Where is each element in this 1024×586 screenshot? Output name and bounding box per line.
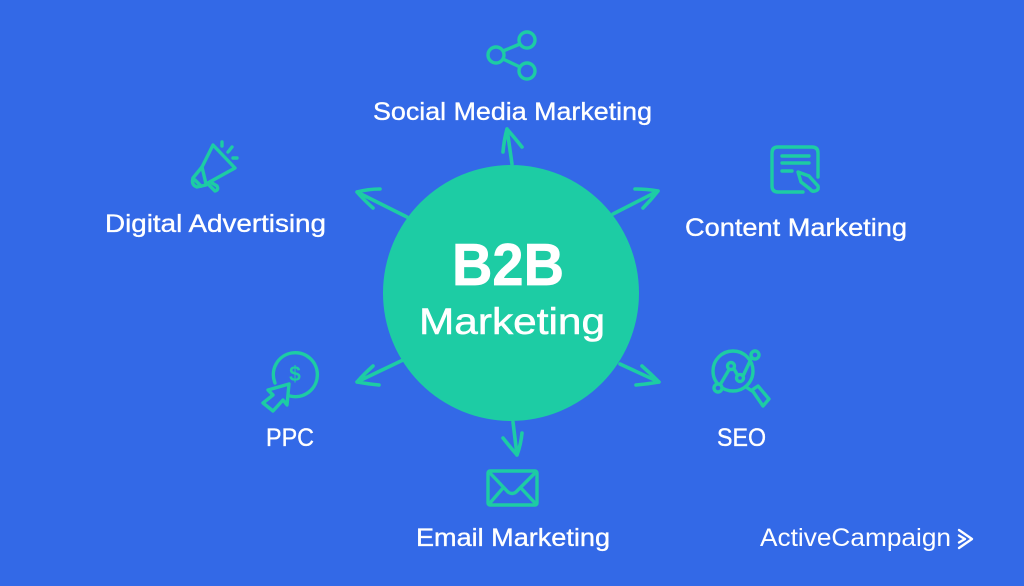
logo: ActiveCampaign: ActiveCampaign bbox=[760, 524, 951, 552]
label: SEO: SEO bbox=[717, 424, 766, 452]
icon: dollar coin with cursor: $ bbox=[289, 363, 301, 386]
icon: document with pencil bbox=[772, 147, 818, 192]
icon: magnifier with chart bbox=[713, 351, 769, 406]
arrow: to SEO bbox=[620, 364, 659, 385]
label: digital advertising: Digital Advertising bbox=[105, 210, 326, 238]
label: PPC: PPC bbox=[266, 424, 314, 452]
icon: megaphone bbox=[192, 142, 237, 191]
icon: share network bbox=[488, 32, 535, 79]
central title: B2B bbox=[452, 232, 564, 298]
central title bbox=[419, 232, 605, 342]
arrow: to social media marketing bbox=[503, 129, 522, 164]
icon: envelope bbox=[488, 471, 537, 505]
arrow: to PPC bbox=[357, 360, 403, 385]
central title: Marketing bbox=[419, 301, 605, 342]
central circle bbox=[383, 165, 639, 421]
label: content marketing: Content Marketing bbox=[685, 214, 907, 242]
arrow: to digital advertising bbox=[357, 189, 407, 217]
label: social media marketing: Social Media Marketing bbox=[373, 98, 652, 126]
label: email marketing: Email Marketing bbox=[416, 524, 610, 552]
arrow: to content marketing bbox=[613, 189, 658, 214]
icon: dollar coin with cursor bbox=[263, 353, 317, 411]
arrow: to email marketing bbox=[503, 422, 522, 455]
